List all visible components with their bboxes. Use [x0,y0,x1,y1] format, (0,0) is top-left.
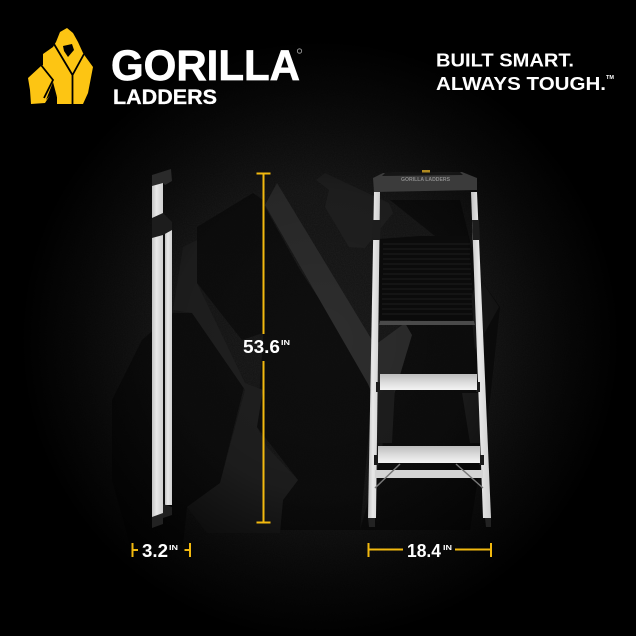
measure line [256,174,270,522]
value: 3.2 [142,540,168,561]
width dimension [368,540,491,561]
left hinge [372,220,381,240]
icon: gorilla [28,28,93,105]
tagline: TM [606,75,614,81]
lower crossbar [375,470,483,478]
unit: IN [169,545,178,552]
tagline: BUILT SMART. [436,50,574,70]
tagline [436,50,614,94]
front view ladder [368,170,491,527]
right rail [471,192,491,518]
rear foot [163,504,172,518]
gap between rails [163,235,165,505]
brackets [132,543,190,557]
rear rail [165,228,172,505]
front rail [152,178,163,519]
left rail [368,192,380,518]
value: 18.4 [407,540,442,561]
value: 53.6 [243,336,280,357]
cap brand text: GORILLA LADDERS [401,177,451,183]
middle step [376,374,480,392]
top cap [373,172,477,192]
thickness dimension [132,540,190,561]
cap tray [382,172,463,176]
unit: IN [443,545,452,552]
top step edge [379,321,475,325]
tagline: ALWAYS TOUGH. [436,73,606,94]
side view ladder [152,169,172,528]
ribbed top step [379,236,473,320]
gorilla silhouette dark patches [112,193,500,545]
logo: Gorilla Ladders [28,28,302,109]
height dimension [243,174,290,522]
sub wordmark: LADDERS [113,86,217,109]
unit: IN [281,340,290,347]
brackets [368,543,491,557]
front foot [152,513,163,528]
hinge plate [152,213,172,238]
top bracket [152,169,172,186]
right hinge [472,220,480,240]
cap accent [422,170,430,172]
gorilla silhouette light bands [173,173,499,533]
wordmark: GORILLA [111,42,300,90]
feet [368,518,375,527]
bottom step [374,446,484,465]
braces [375,464,483,488]
registered mark [297,49,302,53]
